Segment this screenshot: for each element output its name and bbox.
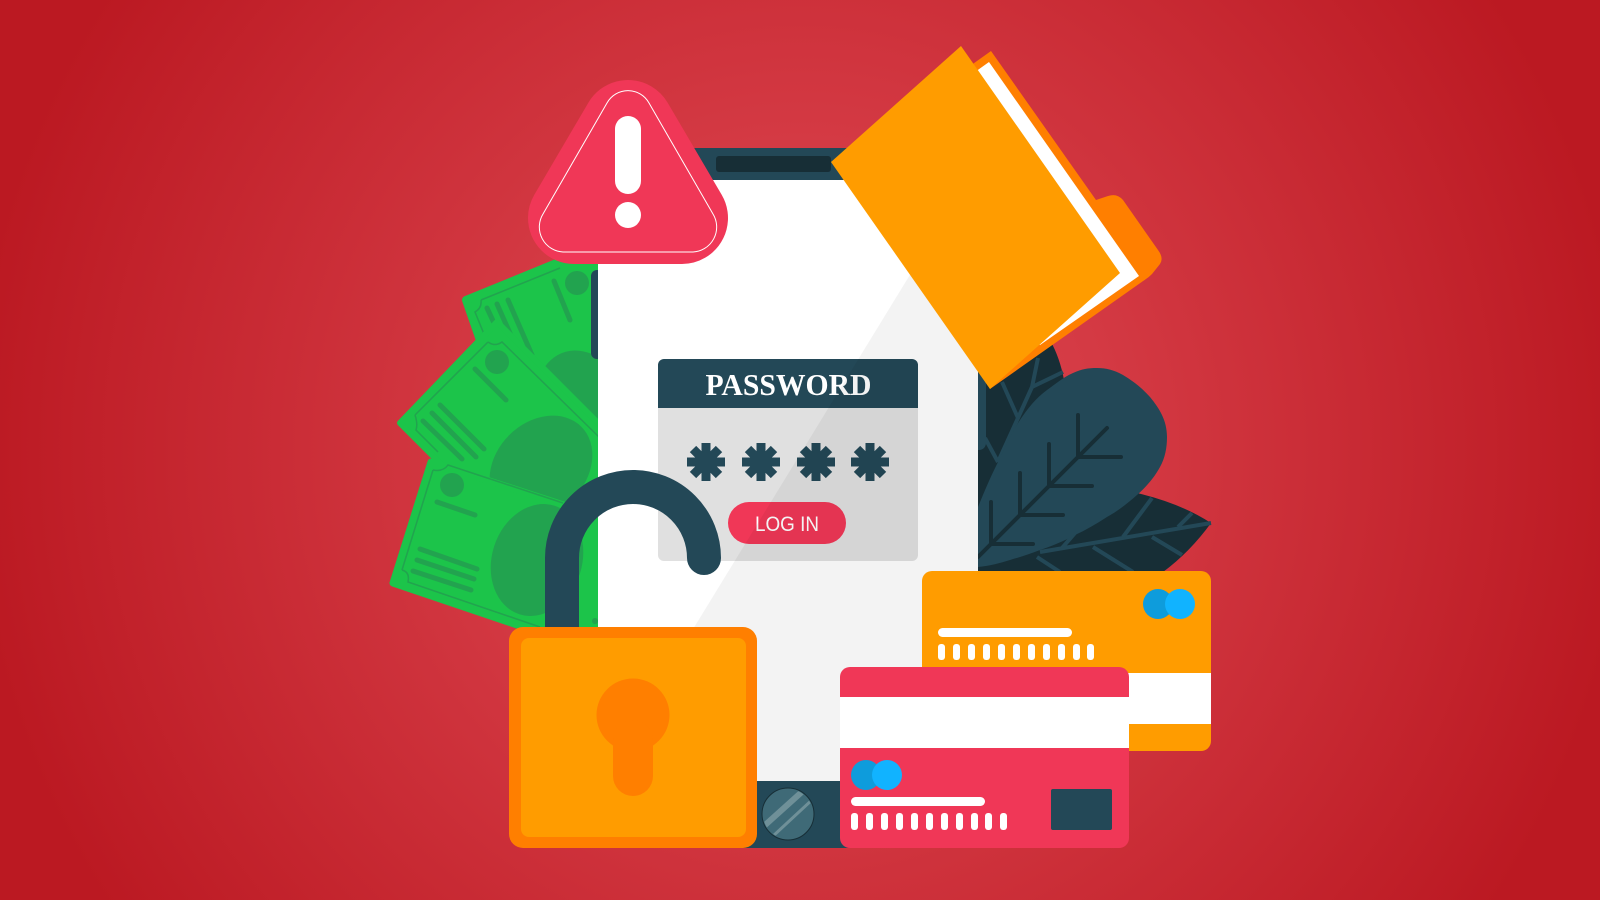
leaf: upper back <box>978 340 1064 520</box>
speaker <box>716 156 831 172</box>
phone screen <box>598 180 978 781</box>
phone bottom bezel <box>700 770 900 848</box>
banknote: bottom <box>393 462 650 670</box>
heading: PASSWORD: PASSWORD <box>706 367 872 402</box>
panel header <box>658 359 918 408</box>
smartphone <box>591 148 978 848</box>
card name bar <box>938 628 1072 637</box>
home button <box>762 788 814 840</box>
card logo <box>1143 589 1195 619</box>
exclamation mark <box>615 116 641 228</box>
padlock shackle <box>562 487 704 640</box>
login button: LOG IN <box>755 513 819 536</box>
padlock inner plate <box>521 638 746 837</box>
login panel <box>658 359 918 561</box>
phone top bezel <box>660 148 910 188</box>
triangle inner outline <box>539 91 717 252</box>
card name bar <box>851 797 985 806</box>
card number ticks <box>938 644 1094 660</box>
keyhole <box>596 678 670 796</box>
password mask: asterisks <box>687 443 889 481</box>
padlock body <box>509 627 757 848</box>
card logo <box>851 760 902 790</box>
leaf: front middle <box>978 368 1167 567</box>
folder <box>831 46 1162 389</box>
leaf: lower right <box>978 493 1211 572</box>
magnetic stripe <box>922 673 1211 724</box>
folder back <box>930 51 1162 389</box>
panel body <box>658 400 918 561</box>
screen sheen <box>600 180 978 781</box>
triangle body <box>574 126 682 218</box>
card number ticks <box>851 813 1007 830</box>
leaves <box>970 330 1211 572</box>
magnetic stripe <box>840 697 1129 748</box>
folder paper <box>975 62 1139 345</box>
credit card: red <box>840 667 1129 848</box>
phone side button: left <box>591 270 605 359</box>
banknotes <box>393 255 650 670</box>
phone side button: right <box>970 330 986 450</box>
login button <box>728 502 846 544</box>
open padlock <box>509 487 757 848</box>
folder front <box>831 46 1120 389</box>
card chip <box>1051 789 1112 830</box>
banknote: middle <box>400 322 650 557</box>
warning triangle <box>539 91 717 252</box>
banknote: top <box>466 255 646 476</box>
credit card: orange <box>922 571 1211 751</box>
